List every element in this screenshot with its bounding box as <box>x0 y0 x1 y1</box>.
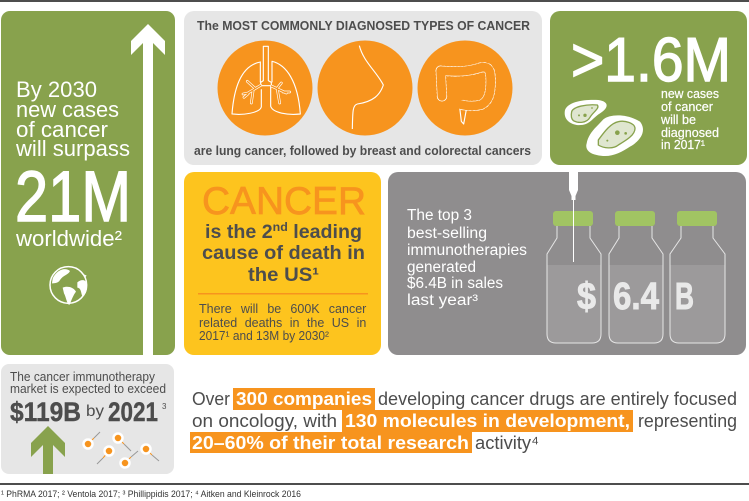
text: new cases of cancer: will be <box>660 113 696 127</box>
panel: 2nd leading cause of death <box>184 172 381 355</box>
icon: cancer cells <box>565 100 643 156</box>
text: market expected to exceed: market is expected to exceed <box>10 381 166 396</box>
icon: green up arrow <box>31 426 65 474</box>
icon: syringe <box>569 172 578 262</box>
stat: $6.4B on vials: 6.4 <box>613 276 659 318</box>
stat: $6.4B on vials: $ <box>577 276 596 318</box>
text: new cases of cancer <box>660 87 719 152</box>
icon: vial 1 <box>547 211 601 343</box>
text: line 1: 300 companies <box>236 388 372 409</box>
text: top 3 immunotherapies <box>407 207 527 309</box>
stat: $6.4B on vials: B <box>675 276 694 318</box>
text: top 3 immunotherapies: best-selling <box>407 225 487 242</box>
text: 2nd leading cause: the US¹ <box>248 265 319 286</box>
text: 600K deaths: related deaths in the US in <box>199 316 366 330</box>
text: line 1 <box>192 388 737 409</box>
stat: 21M: 21M <box>15 158 131 237</box>
stat: $119B by 2021: 2021 <box>108 397 158 427</box>
icon: molecule pins <box>84 432 159 468</box>
text: top 3 immunotherapies: immunotherapies <box>407 242 527 259</box>
text: 2nd leading cause: leading <box>288 222 362 243</box>
text: line 1: developing cancer drugs are entirely focused <box>378 388 737 409</box>
stat: $119B by 2021: $119B <box>10 397 81 427</box>
text: line 3: 20–60% of their total research <box>192 432 469 453</box>
text: top 3 immunotherapies: last year³ <box>407 292 478 309</box>
icon: vial 3 <box>670 211 725 343</box>
text: top 3 immunotherapies: The top 3 <box>407 207 472 224</box>
heading: CANCER: CANCER <box>202 180 366 223</box>
text: top 3 immunotherapies: generated <box>407 259 476 276</box>
text: lung, breast and colorectal: are lung cancer, followed by breast and colorectal cancers <box>194 144 531 158</box>
text: line 2: 130 molecules in development, <box>345 410 630 431</box>
icon: vial 2 <box>609 211 663 343</box>
text: top 3 immunotherapies: $6.4B in sales <box>407 275 503 292</box>
text: 600K deaths <box>199 302 366 343</box>
text: new cases of cancer: in 2017¹ <box>661 138 705 152</box>
text: new cases of cancer: new cases <box>661 87 719 101</box>
panel: most commonly diagnosed cancers <box>184 11 542 165</box>
text: line 2 <box>192 410 737 431</box>
panel: 1.6M new cases in 2017 <box>550 11 747 165</box>
stat: $119B by 2021: 3 <box>162 402 167 411</box>
stat: $119B by 2021 <box>10 397 167 427</box>
icon: colon <box>418 40 512 136</box>
icon: upward arrow <box>131 24 165 355</box>
text: new cases of cancer: diagnosed <box>661 126 719 140</box>
panel: immunotherapy market <box>1 364 174 474</box>
text: by 2030: will surpass <box>15 136 130 161</box>
panel: immunotherapies $6.4B <box>388 172 746 355</box>
text: 600K deaths: 2017¹ and 13M by 2030² <box>199 329 329 343</box>
text: by 2030 <box>15 77 130 161</box>
callout: 300 companies highlights <box>190 388 737 453</box>
stat: over 1.6M: >1.6M <box>571 26 731 95</box>
text: worldwide: worldwide² <box>15 226 122 251</box>
text: line 2: representing <box>638 410 737 431</box>
text: market expected to exceed: The cancer immunotherapy <box>10 369 155 384</box>
panel: 21M new cases by 2030 <box>1 11 175 355</box>
stat: $119B by 2021: by <box>86 403 104 420</box>
stat: $6.4B on vials <box>577 276 694 318</box>
text: by 2030: By 2030 <box>16 77 97 102</box>
text: line 3: activity⁴ <box>475 432 539 453</box>
text: line 1: Over <box>192 388 230 409</box>
icon: globe <box>50 267 87 305</box>
text: 2nd leading cause: nd <box>273 220 288 234</box>
text: new cases of cancer: of cancer <box>661 100 713 114</box>
text: market expected to exceed <box>10 369 166 396</box>
text: line 2: on oncology, with <box>192 410 337 431</box>
heading: most commonly diagnosed: The MOST COMMONLY DIAGNOSED TYPES OF CANCER <box>197 19 530 33</box>
text: 2nd leading cause <box>202 220 365 286</box>
text: 2nd leading cause: is the 2 <box>205 222 270 243</box>
icon: lungs <box>218 40 312 136</box>
text: 600K deaths: There will be 600K cancer <box>199 302 366 316</box>
text: 2nd leading cause: cause of death in <box>202 243 365 264</box>
footnotes: ¹ PhRMA 2017; ² Ventola 2017; ³ Phillippidis 2017; ⁴ Aitken and Kleinrock 2016 <box>1 489 301 500</box>
text: by 2030: of cancer <box>16 117 108 142</box>
icon: breast <box>318 40 412 136</box>
text: by 2030: new cases <box>16 97 119 122</box>
